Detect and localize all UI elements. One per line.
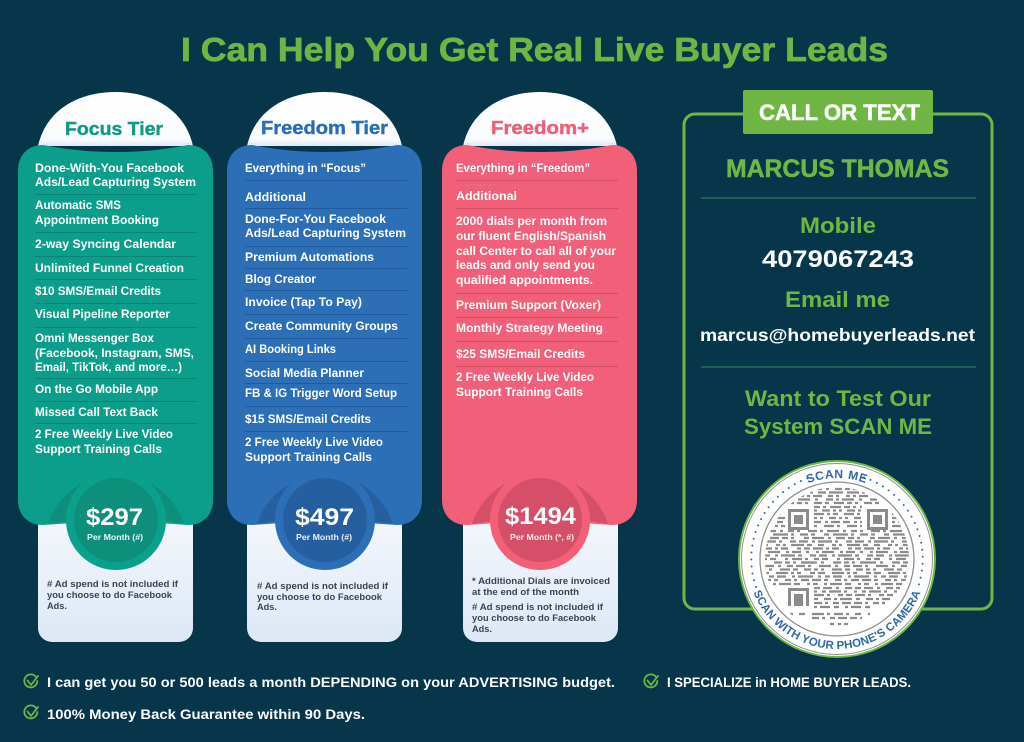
- price badge: Freedom+: Per Month (*, #): [510, 532, 574, 542]
- footnote card: Freedom+: [463, 500, 618, 642]
- price badge: Focus Tier: $297: [86, 504, 143, 531]
- icon: check: [644, 674, 658, 687]
- feature list: Freedom Tier: 2 Free Weekly Live Video: [245, 437, 383, 449]
- contact name: MARCUS THOMAS: [726, 155, 949, 183]
- feature list: Focus Tier: $10 SMS/Email Credits: [35, 286, 161, 298]
- feature list: Freedom+: 2 Free Weekly Live Video: [456, 372, 594, 384]
- feature list: Freedom Tier: Invoice (Tap To Pay): [245, 297, 362, 309]
- title: I Can Help You Get Real Live Buyer Leads: [181, 31, 888, 68]
- feature list: Focus Tier: (Facebook, Instagram, SMS,: [35, 348, 194, 360]
- footnote card: Freedom Tier: [247, 500, 402, 642]
- feature list: Freedom Tier: Ads/Lead Capturing System: [245, 228, 406, 240]
- badge text: scan with your phone's camera: SCAN WITH YOUR PHONE'S CAMERA: [754, 590, 920, 650]
- icon: check: [24, 674, 38, 687]
- feature list: Freedom+: qualified appointments.: [456, 275, 593, 287]
- feature list: Freedom Tier: AI Booking Links: [245, 344, 336, 356]
- feature list: Freedom+: our fluent English/Spanish: [456, 231, 606, 243]
- footnote text: [257, 581, 389, 612]
- footnote text: # Ad spend is not included if: [257, 581, 389, 591]
- price badge: Freedom Tier: [257, 470, 393, 570]
- card body: Focus Tier: [18, 145, 213, 525]
- feature list: Focus Tier: 2 Free Weekly Live Video: [35, 429, 173, 441]
- footnote text: you choose to do Facebook: [257, 592, 383, 602]
- feature list: Freedom Tier: Support Training Calls: [245, 452, 372, 464]
- feature list: Freedom+: call Center to call all of your: [456, 246, 617, 258]
- feature list: Freedom+: [456, 163, 617, 399]
- email label: Email me: [785, 287, 890, 312]
- price badge: Freedom Tier: $497: [295, 504, 354, 531]
- badge: call or text: CALL OR TEXT: [759, 100, 921, 125]
- QR code badge: [738, 460, 936, 658]
- feature list: Freedom Tier: Premium Automations: [245, 252, 374, 264]
- footnote text: at the end of the month: [472, 587, 579, 597]
- feature list: Freedom+: leads and only send you: [456, 260, 595, 272]
- price badge: Focus Tier: [48, 470, 184, 570]
- dome: Freedom+: [463, 92, 617, 146]
- feature list: Freedom Tier: Create Community Groups: [245, 321, 398, 333]
- panel: Focus Tier: [18, 92, 213, 642]
- feature list: Focus Tier: Missed Call Text Back: [35, 407, 159, 419]
- email address: marcus@homebuyerleads.net: [700, 325, 975, 345]
- footnote text: # Ad spend is not included if: [472, 602, 604, 612]
- feature list: Focus Tier: Support Training Calls: [35, 444, 162, 456]
- feature list: Freedom Tier: FB & IG Trigger Word Setup: [245, 388, 397, 400]
- icon: check: [24, 705, 38, 718]
- card body: Freedom Tier: [227, 145, 422, 525]
- bullet: leads per month: I can get you 50 or 500 leads a month DEPENDING on your ADVERTISING budget.: [47, 675, 615, 690]
- phone number: 4079067243: [762, 246, 914, 273]
- card body: Freedom+: [442, 145, 637, 525]
- scan prompt: Want to Test Our: [745, 386, 931, 411]
- bullet: money back guarantee: 100% Money Back Guarantee within 90 Days.: [47, 707, 365, 722]
- feature list: Freedom+: Support Training Calls: [456, 387, 583, 399]
- scan prompt: [744, 386, 932, 439]
- footnote text: * Additional Dials are invoiced: [472, 576, 610, 586]
- feature list: Freedom+: Premium Support (Voxer): [456, 300, 601, 312]
- mobile label: Mobile: [800, 213, 876, 238]
- footnote text: Ads.: [472, 624, 492, 634]
- footnote card: Focus Tier: [38, 500, 193, 642]
- price badge: Focus Tier: Per Month (#): [87, 532, 143, 542]
- dome: Focus Tier: [38, 92, 193, 146]
- footnote text: # Ad spend is not included if: [47, 579, 179, 589]
- feature list: Focus Tier: Appointment Booking: [35, 215, 159, 227]
- panel: Freedom Tier: [227, 92, 422, 642]
- feature list: Focus Tier: Visual Pipeline Reporter: [35, 309, 171, 321]
- feature list: Freedom Tier: Additional: [245, 192, 306, 204]
- footnote text: [472, 576, 610, 634]
- badge text: scan me: SCAN ME: [806, 470, 868, 483]
- feature list: Freedom Tier: Everything in “Focus”: [245, 163, 366, 175]
- feature list: Focus Tier: [35, 163, 196, 456]
- price badge: Freedom+: [472, 470, 608, 570]
- scan prompt: System SCAN ME: [744, 414, 932, 439]
- feature list: Freedom Tier: Done-For-You Facebook: [245, 214, 387, 226]
- footnote text: you choose to do Facebook: [47, 590, 173, 600]
- panel: Freedom+: [442, 92, 637, 642]
- feature list: Freedom+: Monthly Strategy Meeting: [456, 323, 603, 335]
- feature list: Freedom Tier: [245, 163, 406, 464]
- feature list: Freedom Tier: Blog Creator: [245, 274, 317, 286]
- dome: Freedom Tier: [247, 92, 402, 146]
- contact frame: [684, 114, 992, 609]
- feature list: Focus Tier: 2-way Syncing Calendar: [35, 239, 177, 251]
- feature list: Freedom+: $25 SMS/Email Credits: [456, 349, 585, 361]
- footnote text: you choose to do Facebook: [472, 613, 597, 623]
- QR finder marks: [790, 510, 886, 606]
- feature list: Focus Tier: Ads/Lead Capturing System: [35, 177, 196, 189]
- feature list: Focus Tier: Done-With-You Facebook: [35, 163, 185, 175]
- heading: Focus Tier: Focus Tier: [65, 119, 163, 139]
- feature list: Focus Tier: Automatic SMS: [35, 200, 121, 212]
- feature list: Freedom+: Everything in “Freedom”: [456, 163, 590, 175]
- feature list: Freedom+: 2000 dials per month from: [456, 216, 607, 228]
- feature list: Freedom Tier: Social Media Planner: [245, 368, 365, 380]
- feature list: Focus Tier: Email, TikTok, and more…): [35, 362, 182, 374]
- feature list: Focus Tier: Omni Messenger Box: [35, 333, 155, 345]
- panel: contact: [682, 90, 994, 658]
- QR modules: [762, 489, 912, 624]
- badge: call or text: [743, 90, 933, 134]
- feature list: Freedom Tier: $15 SMS/Email Credits: [245, 414, 371, 426]
- price badge: Freedom Tier: Per Month (#): [296, 532, 352, 542]
- price badge: Freedom+: $1494: [505, 503, 577, 530]
- heading: Freedom Tier: Freedom Tier: [261, 118, 388, 138]
- heading: Freedom+: Freedom+: [491, 118, 589, 138]
- bullet: home buyer leads: I SPECIALIZE in HOME BUYER LEADS.: [667, 675, 911, 690]
- feature list: Freedom+: Additional: [456, 191, 517, 203]
- feature list: Focus Tier: On the Go Mobile App: [35, 384, 158, 396]
- footnote text: Ads.: [257, 602, 277, 612]
- footnote text: Ads.: [47, 601, 67, 611]
- feature list: Focus Tier: Unlimited Funnel Creation: [35, 263, 184, 275]
- footnote text: [47, 579, 179, 611]
